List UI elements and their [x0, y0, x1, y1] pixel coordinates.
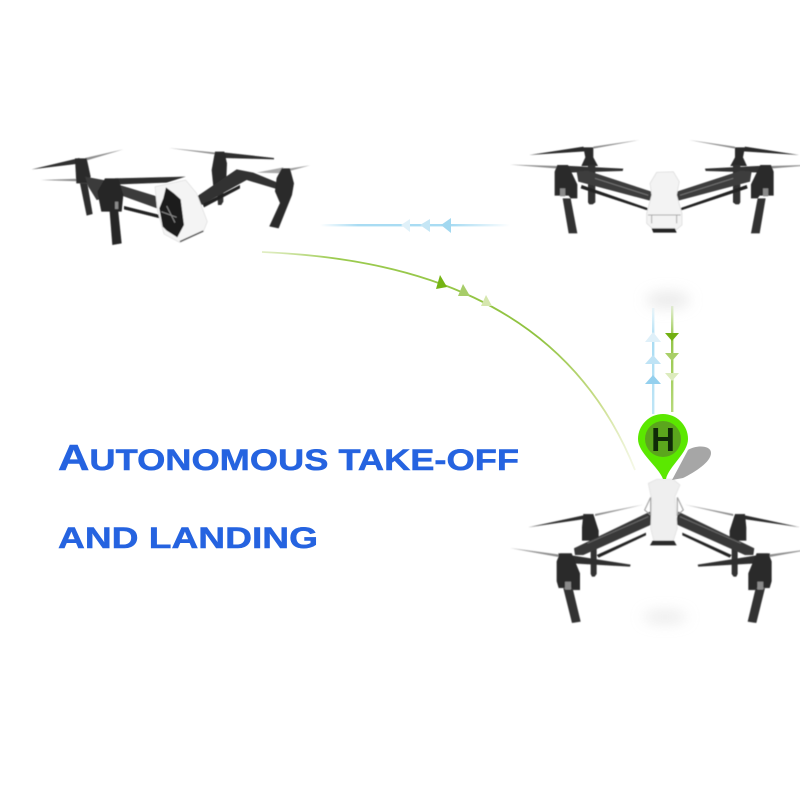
white body shell: [647, 172, 682, 230]
drone: top left, three-quarter view: [32, 148, 310, 245]
arrow: vertical green landing path: [665, 306, 679, 412]
heading: autonomous take-off and landing: [58, 437, 519, 555]
drone: top right, front view: [510, 140, 800, 233]
arrow: horizontal blue flight path: [320, 218, 510, 233]
ground shadow: bottom drone: [643, 611, 687, 623]
arrow: vertical blue take-off path: [645, 308, 661, 414]
ground shadow: top right drone: [646, 292, 690, 308]
arrow: curved green flight path: [262, 252, 635, 470]
icon: home point map pin with H: [638, 414, 711, 480]
heading: autonomous take-off and landing: AND LANDING: [58, 522, 318, 555]
icon: home point map pin with H: H: [651, 421, 675, 458]
white body shell: [648, 479, 680, 541]
drone: bottom right, landed at home point: [510, 479, 800, 623]
white body shell: [155, 180, 207, 243]
heading: autonomous take-off and landing: AUTONOMOUS TAKE-OFF: [58, 437, 519, 478]
